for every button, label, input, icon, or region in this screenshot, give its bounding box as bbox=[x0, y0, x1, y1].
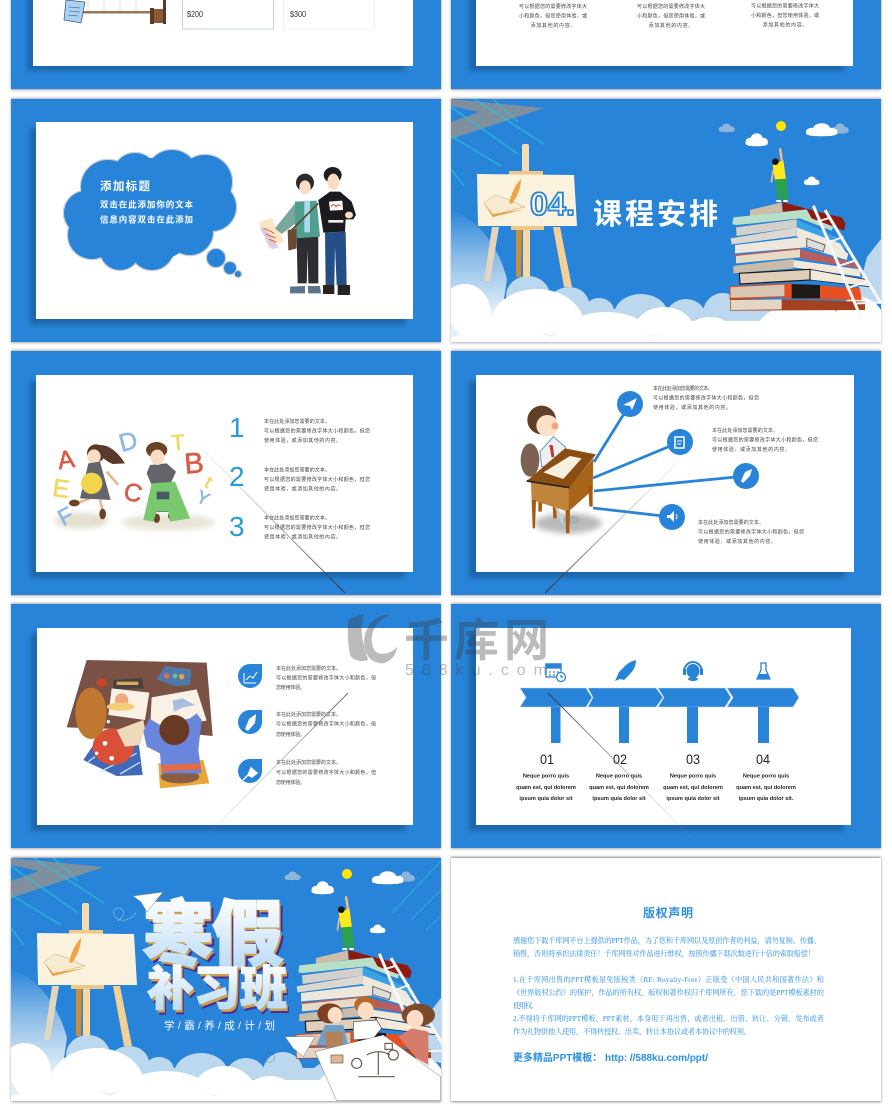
text block 1: 使用体验，或添加其他的内容。 bbox=[264, 437, 341, 444]
notice body: 1.在千库网出售的PPT模板是免版税类（RF: Royalty-Free）正版受《中国人民共和国著作法》和 bbox=[513, 975, 824, 984]
text block 1 bbox=[264, 418, 370, 444]
text block: document bbox=[712, 427, 818, 453]
step 02 bbox=[589, 751, 649, 802]
icon: paper airplane bbox=[113, 892, 163, 921]
text column 3: 添加其他的内容。 bbox=[762, 22, 808, 28]
panel: student at desk slide bbox=[451, 350, 881, 596]
text block: speaker bbox=[698, 519, 804, 545]
letters: Y bbox=[193, 486, 213, 510]
text block: plane: 本在此处添加您需要的文本。 bbox=[653, 385, 713, 392]
text block 3: 可以根据您的需要修改字体大小和颜色，但您 bbox=[264, 524, 370, 531]
step 04: quam est, qui dolorem bbox=[736, 785, 796, 791]
letters: B bbox=[183, 447, 205, 481]
connector lines bbox=[593, 404, 746, 517]
text column 1: 小和颜色，但您使用体验，或 bbox=[519, 12, 587, 20]
text block 2 bbox=[264, 466, 370, 492]
step 04: ipsum quia dolor sit. bbox=[739, 796, 794, 802]
notice title: 版权声明 bbox=[643, 905, 693, 920]
text column 2: 小和颜色，但您使用体验，或 bbox=[637, 12, 705, 20]
timeline stems bbox=[551, 707, 769, 743]
price box: $300 bbox=[284, 0, 374, 29]
panel: drawing children slide bbox=[11, 603, 441, 849]
notice body bbox=[513, 936, 824, 1037]
illustration: children and experiment card bbox=[264, 996, 441, 1101]
text block 1: 可以根据您的需要修改字体大小和颜色，但您 bbox=[264, 428, 370, 434]
step 01: Neque porro quis bbox=[523, 774, 569, 780]
watermark bbox=[348, 614, 549, 679]
text block: rocket bbox=[276, 711, 376, 738]
text block: chart: 可以根据您的需要修改字体大小和颜色，但 bbox=[276, 674, 376, 682]
main title: 补习班: 补习班 bbox=[150, 967, 290, 1020]
text block 2: 本在此处添加您需要的文本。 bbox=[264, 466, 330, 474]
illustration: children at table bbox=[67, 660, 213, 788]
text block: rocket: 可以根据您的需要修改字体大小和颜色，但 bbox=[276, 720, 376, 728]
text block: plane: 可以根据您的需要修改字体大小和颜色，但您 bbox=[653, 394, 759, 402]
main title: 补习班: 补习班 bbox=[149, 965, 289, 1018]
text block: plug: 您使用体验。 bbox=[276, 779, 305, 786]
icon: plug bbox=[238, 759, 262, 783]
text column 2: 添加其他的内容。 bbox=[648, 22, 694, 29]
bubble heading: 添加标题 bbox=[100, 178, 150, 194]
panel: winter class cover bbox=[0, 857, 447, 1106]
illustration: abacus and paper bbox=[64, 0, 166, 24]
step 01: 01 bbox=[540, 751, 554, 767]
panel: three-column text slide (cropped) bbox=[451, 0, 881, 90]
text block: speaker: 使用体验，或添加其他的内容。 bbox=[698, 538, 776, 545]
text block 3 bbox=[264, 514, 370, 540]
step 03: ipsum quia dolor sit bbox=[666, 796, 720, 802]
notice link: 更多精品PPT模板： http: //588ku.com/ppt/ bbox=[513, 1051, 708, 1064]
step 03: quam est, qui dolorem bbox=[663, 785, 723, 791]
main title: 补习班: 补习班 bbox=[147, 962, 287, 1015]
letters: A bbox=[56, 445, 77, 475]
icon: chart bbox=[238, 664, 262, 688]
text block: speaker: 可以根据您的需要修改字体大小和颜色，但您 bbox=[698, 528, 804, 536]
text block 2: 使用体验，或添加其他的内容。 bbox=[264, 486, 341, 492]
section title: 课程安排 bbox=[593, 191, 718, 233]
step 04: 04 bbox=[756, 751, 770, 767]
step 01: ipsum quia dolor sit bbox=[519, 796, 573, 802]
price box: $200 bbox=[182, 0, 274, 29]
text block: plug bbox=[276, 759, 376, 786]
text column 1: 添加其他的内容。 bbox=[530, 22, 576, 29]
illustration: student at desk bbox=[521, 406, 602, 533]
step 02: quam est, qui dolorem bbox=[589, 785, 649, 791]
text block: document: 本在此处添加您需要的文本。 bbox=[712, 427, 778, 434]
text block: rocket: 本在此处添加您需要的文本。 bbox=[276, 711, 341, 718]
text column 1 bbox=[519, 3, 587, 29]
diagonal line: drawing slide bbox=[205, 693, 348, 837]
watermark wordmark: 千库网 bbox=[404, 615, 549, 666]
notice body: 作为礼物供他人使用，不得转授权、出卖、转让本协议或者本协议中的权利。 bbox=[513, 1027, 751, 1037]
text column 2: 可以根据您的需要修改字体大 bbox=[637, 3, 705, 10]
panel: fee table slide (cropped) bbox=[11, 0, 441, 90]
main title: 寒假: 寒假 bbox=[144, 899, 286, 979]
letters: D bbox=[116, 426, 141, 458]
letters: T bbox=[170, 429, 186, 456]
illustration: sky, child and book stack bbox=[285, 869, 447, 1067]
icon: calendar bbox=[546, 664, 566, 682]
text block: plane bbox=[653, 385, 759, 411]
text block 3: 本在此处添加您需要的文本。 bbox=[264, 514, 330, 522]
step 01: quam est, qui dolorem bbox=[516, 785, 576, 791]
icon: rocket bbox=[733, 463, 759, 489]
step 02: ipsum quia dolor sit bbox=[592, 796, 646, 802]
bubble text bbox=[100, 198, 193, 226]
notice body: 《世界版权公约》的保护，作品的所有权、版权和著作权归千库网所有，您下载的是PPT模板素材的 bbox=[513, 988, 824, 998]
step 01 bbox=[516, 751, 576, 802]
icon: flask bbox=[757, 663, 770, 679]
step 02: Neque porro quis bbox=[596, 774, 642, 780]
diagonal line: desk slide bbox=[545, 457, 683, 593]
text block: plane: 使用体验，或添加其他的内容。 bbox=[653, 404, 731, 411]
watermark logo bbox=[348, 614, 397, 663]
text block: chart: 您使用体验。 bbox=[276, 684, 305, 691]
main title: 寒假: 寒假 bbox=[146, 901, 288, 981]
icon: rocket bbox=[615, 660, 636, 681]
text column 2 bbox=[637, 3, 705, 29]
step 04: Neque porro quis bbox=[743, 774, 789, 780]
step 03: Neque porro quis bbox=[670, 774, 716, 780]
panel: section 04 cover bbox=[450, 96, 882, 344]
step 03 bbox=[663, 751, 723, 802]
text block: plug: 可以根据您的需要修改字体大小和颜色，但 bbox=[276, 769, 376, 776]
text block: rocket: 您使用体验。 bbox=[276, 731, 305, 738]
illustration: two students bbox=[258, 167, 356, 295]
notice body: 感谢您下载千库网平台上提供的PPT作品，为了您和千库网以及原创作者的利益，请勿复制、传播、 bbox=[513, 936, 821, 946]
price box: $200: $200 bbox=[187, 10, 203, 19]
panel: alphabet slide bbox=[11, 350, 441, 596]
letters: F bbox=[53, 501, 78, 531]
step 03: 03 bbox=[686, 751, 700, 767]
step 02: 02 bbox=[613, 751, 627, 767]
text block: chart bbox=[276, 665, 376, 691]
icon: headset bbox=[683, 662, 703, 681]
text column 3: 可以根据您的需要修改字体大 bbox=[751, 2, 819, 10]
text column 1: 可以根据您的需要修改字体大 bbox=[519, 3, 587, 10]
letters: E bbox=[51, 474, 71, 504]
notice body: 2.不得将千库网的PPT模板、PPT素材，本身用于再出售，或者出租、出借、转让、分销、发布或者 bbox=[513, 1014, 824, 1024]
text block: chart: 本在此处添加您需要的文本。 bbox=[276, 665, 341, 672]
illustration: sky, child and book stack bbox=[719, 121, 881, 319]
number 1: 1 bbox=[229, 412, 245, 443]
text block 1: 本在此处添加您需要的文本。 bbox=[264, 418, 330, 425]
letters bbox=[51, 426, 216, 531]
main title: 寒假: 寒假 bbox=[142, 896, 284, 976]
watermark url: 588ku.com bbox=[405, 662, 547, 679]
number 3: 3 bbox=[229, 511, 245, 542]
letters: C bbox=[121, 477, 145, 509]
icon: paper plane bbox=[617, 391, 643, 417]
number 2: 2 bbox=[229, 461, 245, 492]
panel: thought cloud slide bbox=[11, 98, 441, 343]
icon: rocket bbox=[238, 710, 262, 734]
bubble text: 信息内容双击在此添加 bbox=[100, 214, 193, 226]
subtitle: 学 / 霸 / 养 / 成 / 计 / 划 bbox=[164, 1019, 275, 1032]
bubble text: 双击在此添加你的文本 bbox=[100, 198, 193, 210]
text block: document: 使用体验，或添加其他的内容。 bbox=[712, 446, 790, 453]
notice body: 使用权。 bbox=[513, 1001, 538, 1010]
diagonal line: alphabet slide bbox=[196, 443, 345, 593]
price box: $300: $300 bbox=[290, 10, 306, 19]
panel: four-step timeline slide bbox=[451, 603, 881, 849]
icon: speaker bbox=[659, 504, 685, 530]
text block: speaker: 本在此处添加您需要的文本。 bbox=[698, 519, 764, 526]
text block 2: 可以根据您的需要修改字体大小和颜色，但您 bbox=[264, 476, 370, 483]
panel: copyright notice bbox=[451, 857, 881, 1102]
text block: document: 可以根据您的需要修改字体大小和颜色，但您 bbox=[712, 436, 818, 444]
illustration: children with letters bbox=[55, 442, 215, 530]
text column 3: 小和颜色，但您使用体验，或 bbox=[751, 12, 819, 19]
thought bubble bbox=[64, 150, 241, 277]
timeline chevrons bbox=[520, 688, 799, 707]
icon: document bbox=[667, 429, 693, 455]
section number: 04. bbox=[530, 186, 575, 222]
text block: plug: 本在此处添加您需要的文本。 bbox=[276, 759, 341, 766]
diagonal line: timeline slide bbox=[548, 693, 691, 837]
letters: t bbox=[201, 472, 216, 492]
step 04 bbox=[736, 751, 796, 802]
text column 3 bbox=[751, 2, 819, 28]
text block 3: 使用体验，或添加其他的内容。 bbox=[264, 534, 341, 540]
notice body: 销售，否则将承担法律责任！千库网将对作品进行维权，按照传播下载次数进行十倍的索取赔偿！ bbox=[513, 949, 815, 959]
